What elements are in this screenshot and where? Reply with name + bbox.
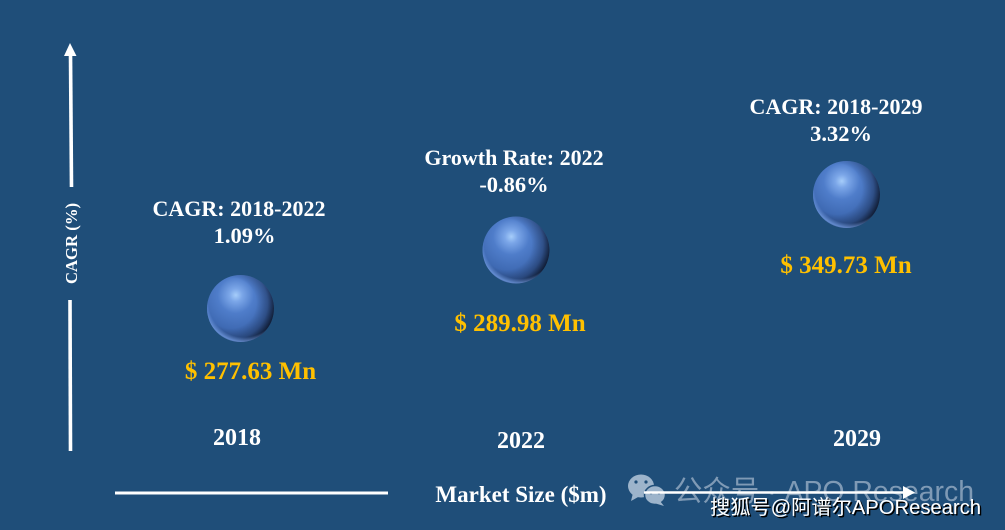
value: 3.32%: 3.32% [810, 121, 872, 146]
arrow: y axis upper with arrowhead [64, 43, 76, 187]
x axis left line [115, 492, 388, 494]
icon: sphere [813, 161, 880, 228]
x axis arrow [644, 486, 915, 499]
value: -0.86%: -0.86% [479, 172, 549, 197]
market size 2029: $ 349.73 Mn [780, 252, 912, 279]
data point: 2029 [750, 94, 922, 452]
watermark text: 公众号 · APO Research [674, 476, 974, 508]
icon: sphere [207, 275, 274, 342]
icon: WeChat bubbles [628, 474, 666, 506]
icon: sphere [482, 216, 550, 284]
market size 2022: $ 289.98 Mn [454, 310, 586, 337]
label: CAGR 2018-2029: CAGR: 2018-2029 [750, 94, 922, 119]
y axis: CAGR (%) [62, 43, 81, 451]
watermark: Sohu: 搜狐号@阿谱尔APOResearch [710, 496, 981, 519]
value: 1.09%: 1.09% [214, 223, 275, 248]
watermark: WeChat public account [628, 474, 974, 508]
year 2018: 2018 [213, 425, 261, 451]
market size 2018: $ 277.63 Mn [185, 358, 316, 385]
label: CAGR 2018-2022: CAGR: 2018-2022 [153, 196, 325, 221]
data point: 2022 [424, 145, 604, 454]
y axis lower line [68, 300, 72, 451]
year 2022: 2022 [497, 428, 545, 454]
year 2029: 2029 [833, 426, 881, 452]
y axis label: CAGR (%) [62, 203, 81, 284]
label: Growth Rate 2022: Growth Rate: 2022 [424, 145, 604, 170]
x axis label: Market Size ($m) [435, 482, 607, 507]
data point: 2018 [153, 196, 325, 451]
